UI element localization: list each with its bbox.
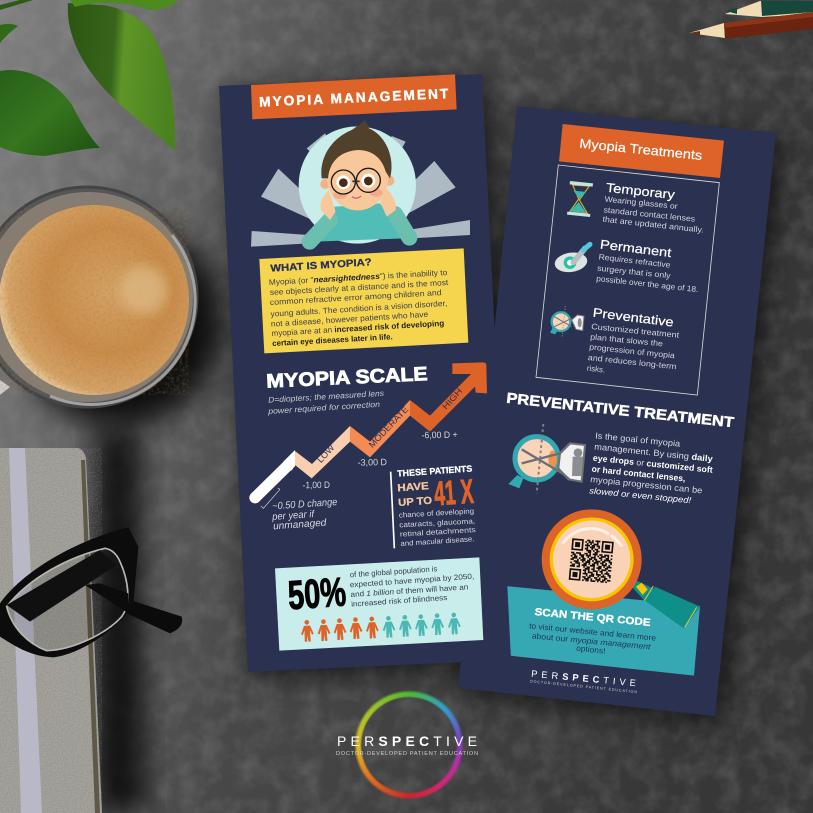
callout: these patients 41x [391, 463, 476, 548]
text: temporary [602, 181, 704, 235]
notebook [0, 448, 102, 813]
text: scan the QR code: options! [576, 644, 606, 656]
logo: perspective on card: PERSPECTIVE [531, 669, 636, 688]
panel: 50 percent statistic: of the global population is [350, 564, 438, 579]
heading: myopia scale [266, 364, 428, 416]
orange heading: Myopia Treatments [559, 124, 724, 178]
text: preventative: Preventative [592, 306, 674, 330]
text: preventative treatment description: or hard contact lenses, [591, 464, 686, 484]
text: permanent: Requires refractive [598, 252, 672, 270]
callout: what is myopia: WHAT IS MYOPIA? [270, 257, 372, 275]
text: preventative: Customized treatment [591, 322, 680, 340]
panel: right card, myopia treatments [458, 106, 776, 716]
text: preventative [586, 306, 680, 375]
text: temporary: standard contact lenses [603, 205, 696, 224]
text: scan the QR code: about our myopia management [531, 631, 652, 651]
pencils [689, 1, 813, 39]
eyeglasses [0, 527, 182, 657]
icon: hourglass [567, 181, 593, 217]
chart: rising scale arrow: MODERATE [367, 404, 411, 450]
icon: preventative eye diagram [550, 306, 584, 337]
leaves [0, 0, 178, 156]
text: permanent: Permanent [599, 237, 673, 260]
logo: perspective wordmark: PER SPEC TIVE [337, 733, 477, 749]
annotation: change per year [261, 488, 338, 532]
heading: myopia scale: D=diopters; the measured lens [268, 389, 384, 405]
callout: these patients 41x: UP TO [398, 496, 432, 509]
icon row: ten people [300, 612, 461, 642]
text: temporary: that are updated annually. [602, 215, 704, 235]
panel: 50 percent statistic: increased risk of blindness [351, 593, 448, 609]
text: preventative treatment description: eye drops or customized soft [592, 453, 713, 475]
callout: what is myopia: Myopia (or "nearsightedness") is the inability to [269, 268, 448, 287]
callout: what is myopia [259, 248, 468, 353]
callout: these patients 41x: 41 X [433, 473, 475, 513]
annotation: change per year: per year if [271, 509, 316, 523]
icon: magnifying glass with QR code [542, 509, 700, 629]
callout: what is myopia: common refractive error among children and [270, 288, 442, 307]
text: scan the QR code: SCAN THE QR CODE [534, 607, 651, 629]
callout: these patients 41x: THESE PATIENTS [397, 463, 473, 479]
chart: rising scale arrow [255, 362, 487, 498]
title banner [251, 74, 457, 119]
text: preventative treatment description: management. By using daily [594, 441, 713, 464]
callout: these patients 41x: retinal detachments [400, 525, 476, 539]
teal band [505, 586, 700, 676]
text: scan the QR code: to visit our website and learn more [529, 621, 657, 643]
annotation: change per year: ~0.50 D change [272, 497, 338, 512]
labels: diopter values: -3,00 D [358, 457, 387, 468]
logo: rainbow ring [354, 690, 464, 800]
text: permanent: surgery that is only [597, 264, 671, 280]
chart: rising scale arrow: HIGH [440, 386, 464, 411]
text: permanent [596, 237, 699, 294]
text: preventative treatment description: myopia progression can be [590, 474, 703, 495]
text: preventative treatment description: Is the goal of myopia [595, 430, 681, 449]
callout: what is myopia: see objects clearly at a distance and is the most [270, 278, 449, 297]
callout: these patients 41x: chance of developing [399, 506, 474, 520]
illustration: boy with glasses [251, 120, 470, 247]
text: temporary: Wearing glasses or [604, 195, 678, 211]
callout: what is myopia: not a disease, however patients who have [271, 310, 429, 329]
title banner: MYOPIA MANAGEMENT [259, 86, 449, 110]
heading: preventative treatment: PREVENTATIVE TREATMENT [506, 391, 735, 431]
callout: what is myopia: myopia are at an increased risk of developing [271, 319, 445, 338]
card shadows [226, 80, 783, 722]
panel: 50 percent statistic: and 1 billion of them will have an [350, 582, 469, 599]
panel: 50 percent statistic: expected to have myopia by 2050, [350, 572, 475, 589]
text: scan the QR code [529, 607, 657, 656]
callout: what is myopia: certain eye diseases later in life. [272, 332, 393, 348]
panel: 50 percent statistic [275, 557, 483, 651]
text: preventative: risks. [586, 364, 606, 375]
text: preventative treatment description: slowed or even stopped! [589, 485, 692, 505]
logo: perspective wordmark [336, 733, 478, 757]
text: temporary: Temporary [605, 181, 676, 202]
heading: myopia scale: power required for correction [267, 400, 381, 416]
callout: what is myopia: young adults. The condition is a vision disorder, [270, 299, 447, 319]
labels: diopter values [303, 430, 458, 490]
labels: diopter values: -1,00 D [303, 480, 330, 490]
logo: perspective wordmark: DOCTOR-DEVELOPED PATIENT EDUCATION [336, 751, 478, 757]
logo: perspective on card: DOCTOR-DEVELOPED PATIENT EDUCATION [530, 679, 637, 694]
panel: 50 percent statistic: 50% [286, 568, 347, 618]
labels: diopter values: -6,00 D + [422, 430, 458, 440]
panel: left card, myopia management [219, 74, 511, 672]
chart: rising scale arrow: LOW [315, 442, 337, 465]
text: preventative: progression of myopia [589, 342, 676, 360]
QR code [569, 538, 614, 583]
callout: these patients 41x: HAVE [397, 481, 429, 494]
heading: myopia scale: MYOPIA SCALE [266, 364, 428, 393]
orange heading: Myopia Treatments: Myopia Treatments [579, 136, 703, 163]
text: preventative: plan that slows the [590, 332, 664, 348]
text: preventative: and reduces long-term [587, 353, 677, 371]
callout: these patients 41x: and macular disease. [400, 534, 475, 548]
text: permanent: possible over the age of 18. [596, 274, 699, 294]
callout: these patients 41x: cataracts, glaucoma, [399, 516, 475, 529]
annotation: change per year: unmanaged [273, 518, 327, 532]
text: preventative treatment description [589, 430, 713, 505]
icon: refractive surgery eye [553, 244, 590, 274]
coffee cup [0, 187, 197, 407]
icon: myopic eye diagram [508, 424, 585, 493]
